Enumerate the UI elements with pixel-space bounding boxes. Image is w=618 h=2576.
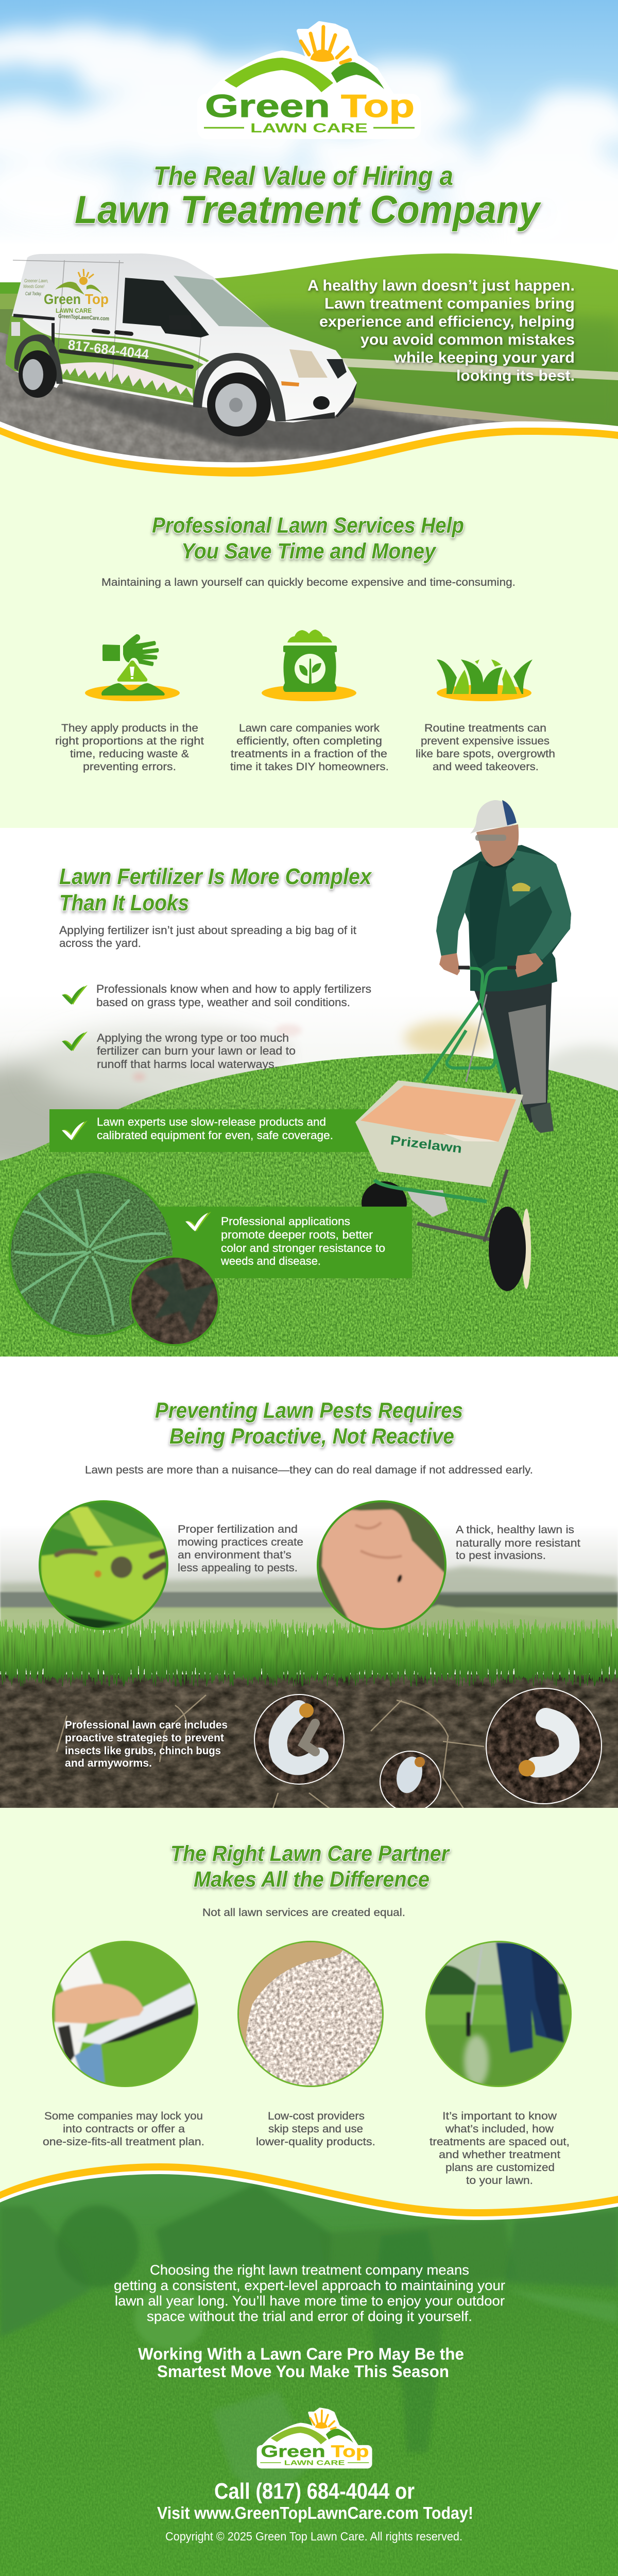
panel: hero [0, 0, 618, 484]
photo: insect on hand [317, 1500, 448, 1633]
photo: grub one [254, 1694, 345, 1785]
icon: check [62, 985, 88, 1005]
caption: what to know: what’s included, how [445, 2123, 554, 2135]
wave divider [0, 421, 618, 484]
hands [439, 953, 460, 975]
van logo and lettering [11, 269, 109, 336]
landscape background [0, 1525, 618, 1633]
closing statement: Working With a Lawn Care Pro May Be the [138, 2345, 464, 2363]
caption: efficiency [230, 722, 389, 773]
lawn texture [0, 2215, 618, 2576]
sidewalk [342, 358, 618, 380]
intro text [307, 277, 575, 384]
icon: check [62, 1031, 88, 1051]
closing statement: Smartest Move You Make This Season [157, 2362, 449, 2381]
van logo and lettering: Call Today. [25, 291, 42, 296]
heading [155, 1398, 463, 1449]
caption: prevention [416, 722, 555, 773]
heading [59, 864, 372, 916]
callout: slow-release: Lawn experts use slow-release products and [97, 1115, 326, 1128]
man with spreader [355, 800, 571, 1291]
closing statement [138, 2345, 464, 2381]
panel: footer [0, 2163, 618, 2576]
road [0, 332, 505, 463]
spreader frame [407, 1190, 448, 1217]
callout: deeper roots: color and stronger resistance to [221, 1242, 385, 1255]
caption: efficiency: time it takes DIY homeowners. [230, 761, 389, 773]
torso [453, 845, 571, 992]
van wheel arches [14, 334, 63, 384]
logo sun [301, 27, 350, 77]
caption: prevention: like bare spots, overgrowth [416, 748, 555, 760]
van white grass strip [60, 362, 193, 398]
heading [170, 1841, 450, 1892]
intro text: you avoid common mistakes [360, 331, 575, 348]
contact details: Copyright © 2025 Green Top Lawn Care. All rights reserved. [165, 2530, 462, 2543]
logo [197, 23, 421, 139]
caption: what to know: to your lawn. [466, 2175, 533, 2187]
van front wheel [207, 372, 271, 436]
intro text: Lawn treatment companies bring [324, 295, 575, 312]
caption: contracts [43, 2110, 204, 2148]
logo wordmark top: Top [341, 89, 415, 124]
footer background photo [0, 2164, 618, 2576]
heading: Preventing Lawn Pests Requires [155, 1398, 463, 1423]
text: proactive strategies: proactive strategies to prevent [65, 1732, 224, 1744]
photo: lawn spraying [425, 1941, 577, 2087]
soil [0, 1674, 618, 1808]
caption: efficiency: Lawn care companies work [239, 722, 380, 734]
panel: fertilizer [0, 800, 618, 1357]
legs [471, 976, 552, 1123]
icon: check [62, 1121, 88, 1140]
caption: contracts: Some companies may lock you [44, 2110, 203, 2122]
logo hills [225, 58, 333, 92]
van logo and lettering: Greener Lawn, [24, 278, 48, 283]
closing paragraph: Choosing the right lawn treatment company means [150, 2262, 469, 2278]
icon: hand with warning [85, 634, 180, 701]
intro text: A healthy lawn doesn’t just happen. [307, 277, 575, 294]
rear wheel left [362, 1181, 407, 1225]
caption: low cost: lower-quality products. [256, 2136, 375, 2148]
van panel lines [13, 260, 201, 407]
title [75, 161, 542, 232]
title: Lawn Treatment Company [75, 188, 542, 232]
wave divider [0, 2163, 618, 2267]
van phone number: 817-684-4044 [67, 337, 150, 362]
spreader handle [423, 968, 516, 1091]
photo: thistle weed [129, 1255, 221, 1347]
head [476, 824, 519, 867]
caption: what to know: plans are customized [445, 2162, 555, 2174]
spreader hopper [355, 1080, 523, 1187]
caption: contracts: one-size-fits-all treatment plan. [43, 2136, 204, 2148]
van logo and lettering: LAWN CARE [56, 307, 92, 314]
heading: Lawn Fertilizer Is More Complex [59, 864, 372, 889]
van body [6, 253, 357, 422]
van [6, 253, 357, 436]
intro text [59, 924, 356, 950]
right arm [506, 850, 571, 960]
photo: fertilizer pellets [237, 1941, 384, 2087]
bullet: wrong type: fertilizer can burn your lawn or lead to [97, 1044, 296, 1057]
hazy background shrubs [0, 994, 618, 1175]
grass band [0, 1627, 618, 1679]
van logo and lettering: Green [44, 291, 81, 307]
bullet: when and how: Professionals know when and how to apply fertilizers [96, 982, 371, 995]
intro text: experience and efficiency, helping [319, 313, 575, 330]
photo: clipboard inspection [52, 1941, 201, 2092]
text: fertilization and mowing [178, 1523, 303, 1574]
caption: right proportions [55, 722, 204, 773]
van shadow [46, 387, 479, 456]
footer logo: Top [331, 2442, 369, 2461]
van handles and rub strip [94, 331, 131, 334]
bullet: wrong type: runoff that harms local waterways. [97, 1058, 278, 1071]
callout: deeper roots [158, 1207, 412, 1278]
callout: slow-release [49, 1109, 374, 1152]
text: proactive strategies [65, 1719, 228, 1769]
callout: slow-release: calibrated equipment for even, safe coverage. [97, 1129, 333, 1142]
closing paragraph [114, 2262, 505, 2324]
contact details [157, 2479, 473, 2543]
van green wrap [6, 316, 209, 403]
caption: what to know: It’s important to know [442, 2110, 557, 2122]
curb [348, 398, 581, 423]
icon: check [185, 1212, 211, 1231]
photo: caterpillars on leaf [39, 1500, 169, 1633]
text: proactive strategies: insects like grubs, chinch bugs [65, 1745, 221, 1757]
logo wordmark: Green [205, 89, 330, 124]
intro text: Applying fertilizer isn’t just about spreading a big bag of it [59, 924, 356, 937]
collar [485, 855, 515, 868]
caption: contracts: into contracts or offer a [63, 2123, 185, 2135]
callout: deeper roots: promote deeper roots, better [221, 1228, 373, 1241]
boot [530, 1103, 554, 1133]
heading: Than It Looks [59, 890, 189, 916]
heading: You Save Time and Money [181, 539, 437, 564]
houses [0, 2183, 618, 2504]
bullet: when and how [62, 982, 371, 1009]
icon: grass [437, 659, 533, 701]
text: fertilization and mowing: an environment that’s [178, 1549, 291, 1561]
heading: The Right Lawn Care Partner [170, 1841, 450, 1866]
caption: what to know: treatments are spaced out, [430, 2136, 570, 2148]
title: The Real Value of Hiring a [153, 161, 453, 191]
heading [152, 513, 464, 564]
photo: grub three [486, 1688, 602, 1804]
text: fertilization and mowing: mowing practices create [178, 1536, 303, 1548]
caption: efficiency: efficiently, often completing [236, 735, 382, 747]
bullet: when and how: based on grass type, weather and soil conditions. [96, 996, 350, 1009]
photo: weeds in lawn [9, 1170, 175, 1340]
caption: right proportions: They apply products in the [61, 722, 198, 734]
intro sentence: Maintaining a lawn yourself can quickly become expensive and time-consuming. [101, 577, 516, 588]
torso dark centre [470, 860, 507, 969]
intro sentence: Not all lawn services are created equal. [202, 1907, 405, 1919]
bullet: wrong type: Applying the wrong type or too much [97, 1031, 289, 1044]
heading: Being Proactive, Not Reactive [169, 1424, 454, 1449]
man and spreader silhouette [371, 2231, 443, 2452]
shirt logo [512, 883, 530, 891]
intro text: across the yard. [59, 937, 141, 950]
van logo and lettering: Top [85, 291, 109, 307]
van rear wheel [19, 350, 57, 398]
caption: right proportions: time, reducing waste & [70, 748, 189, 760]
text: proactive strategies: and armyworms. [65, 1757, 152, 1769]
contact details: Call (817) 684-4044 or [214, 2479, 415, 2504]
spreader wheel [522, 1209, 531, 1289]
photo: grub two [380, 1751, 441, 1812]
van logo and lettering: GreenTopLawnCare.com [58, 313, 109, 322]
sky with clouds [0, 0, 618, 227]
closing paragraph: getting a consistent, expert-level approach to maintaining your [114, 2278, 505, 2293]
footer logo: Green [261, 2442, 325, 2461]
closing paragraph: lawn all year long. You’ll have more time to enjoy your outdoor [115, 2293, 505, 2309]
lawn hills [0, 253, 618, 436]
caption: efficiency: treatments in a fraction of the [231, 748, 387, 760]
roots [57, 1695, 484, 1808]
van logo and lettering: Weeds Gone! [23, 284, 44, 289]
caption: prevention: and weed takeovers. [433, 761, 539, 773]
intro sentence: Lawn pests are more than a nuisance—they can do real damage if not addressed early. [85, 1464, 533, 1476]
caption: what to know: and whether treatment [439, 2149, 560, 2161]
contact details: Visit www.GreenTopLawnCare.com Today! [157, 2503, 473, 2522]
heading: Professional Lawn Services Help [152, 513, 464, 538]
spreader brand: Prizelawn [389, 1133, 463, 1156]
van front end [289, 349, 328, 378]
text: fertilization and mowing: Proper fertilization and [178, 1523, 298, 1535]
callout: deeper roots: weeds and disease. [220, 1255, 321, 1267]
icon: fertilizer bag [262, 630, 356, 701]
caption: right proportions: preventing errors. [83, 761, 176, 773]
intro text: while keeping your yard [393, 349, 575, 366]
intro text: looking its best. [456, 367, 575, 384]
caption: low cost: skip steps and use [268, 2123, 363, 2135]
panel: pests [0, 1357, 618, 1812]
caption: low cost [256, 2110, 375, 2148]
text: thick healthy lawn [456, 1524, 580, 1562]
bullet: wrong type [62, 1031, 296, 1071]
callout: deeper roots: Professional applications [221, 1215, 350, 1228]
logo tagline: LAWN CARE [250, 121, 368, 135]
left arm [436, 860, 479, 957]
van windows [123, 278, 209, 337]
caption: what to know [430, 2110, 570, 2187]
cap [470, 800, 517, 834]
caption: low cost: Low-cost providers [268, 2110, 365, 2122]
text: thick healthy lawn: to pest invasions. [456, 1550, 546, 1562]
panel: save time and money [0, 477, 618, 828]
text: thick healthy lawn: A thick, healthy lawn is [456, 1524, 574, 1536]
heading: Makes All the Difference [194, 1867, 430, 1892]
caption: prevention: prevent expensive issues [421, 735, 550, 747]
footer logo [257, 2409, 372, 2468]
text: fertilization and mowing: less appealing to pests. [178, 1562, 298, 1574]
caption: prevention: Routine treatments can [424, 722, 546, 734]
caption: right proportions: right proportions at the right [55, 735, 204, 747]
panel: right partner [0, 1808, 618, 2220]
text: thick healthy lawn: naturally more resistant [456, 1537, 580, 1549]
footer logo: LAWN CARE [284, 2459, 345, 2467]
lawn texture [0, 1054, 618, 1357]
closing paragraph: space without the trial and error of doing it yourself. [147, 2309, 472, 2324]
text: proactive strategies: Professional lawn care includes [65, 1719, 228, 1731]
